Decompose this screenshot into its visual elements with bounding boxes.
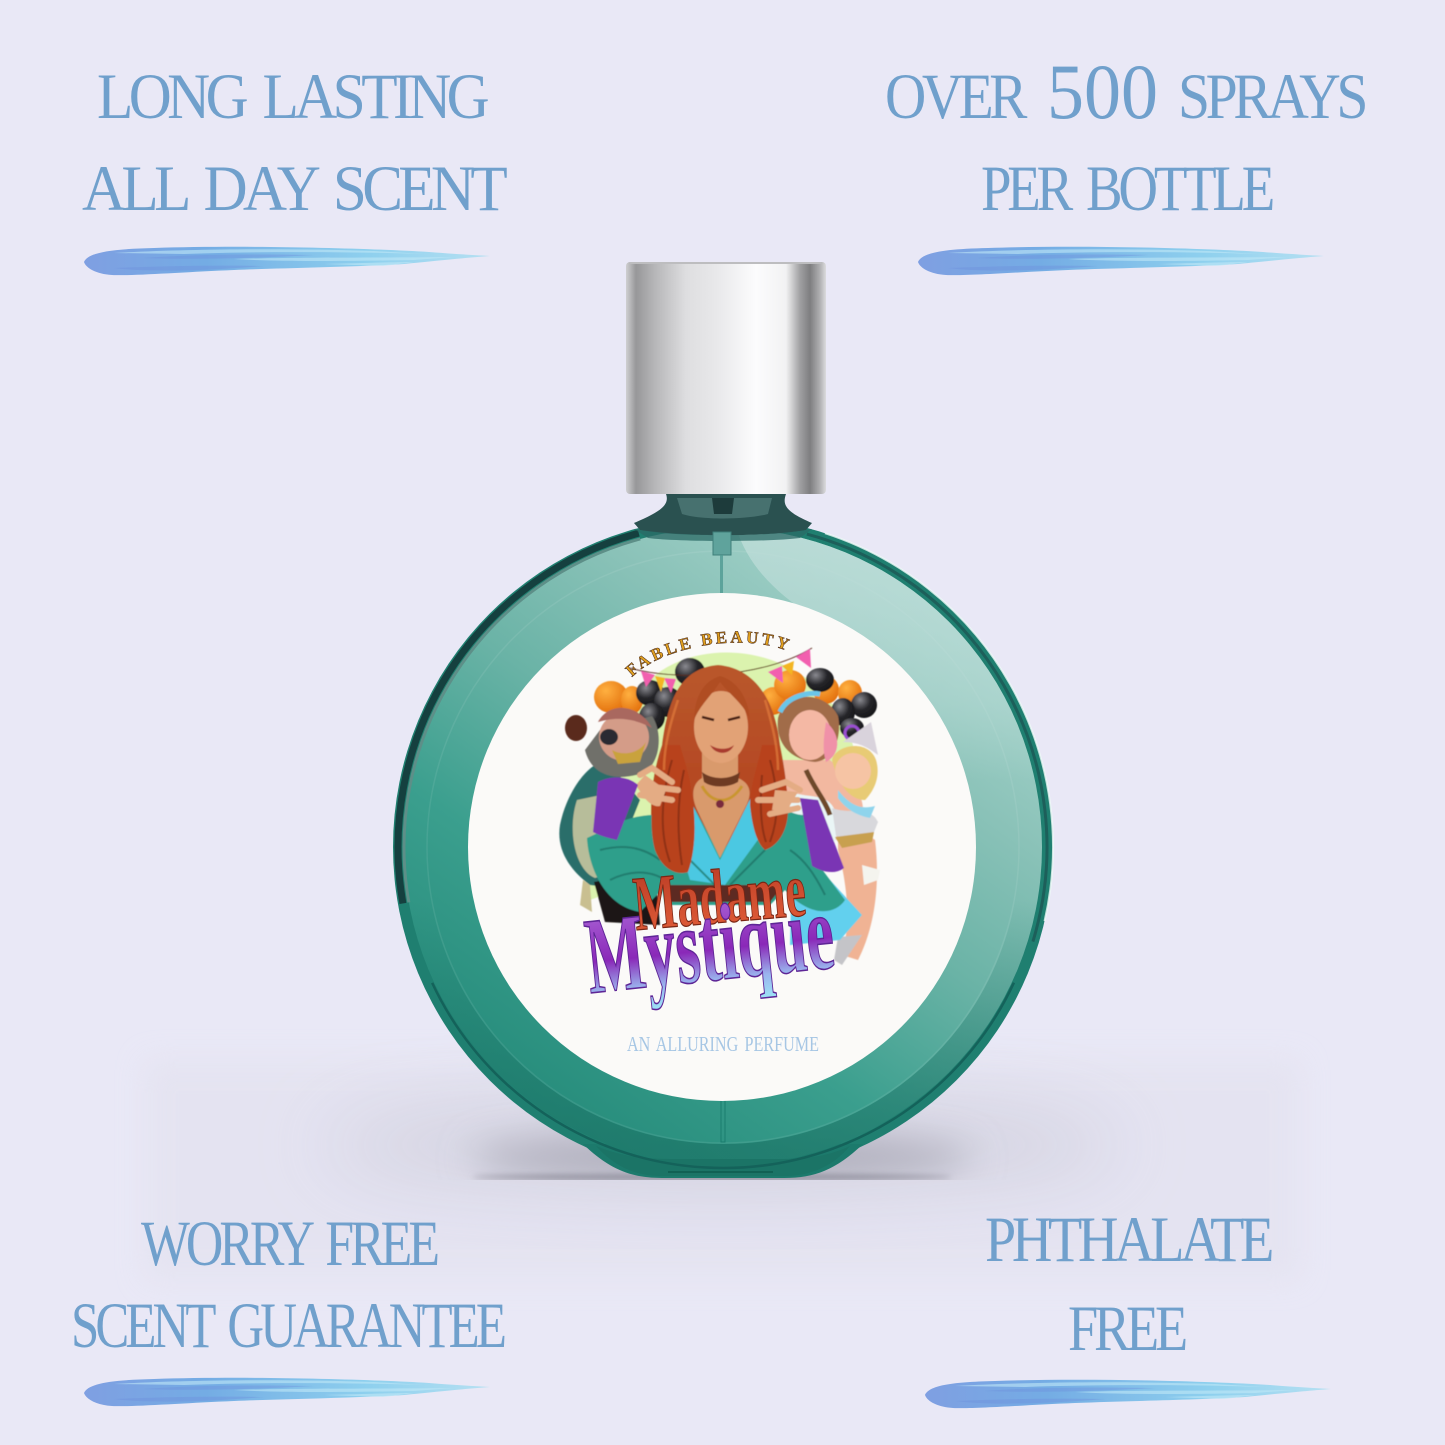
label illustration [558,631,879,1017]
blue cape [790,860,862,945]
perfume bottle [393,262,1054,1178]
bunting [630,648,812,693]
balloons [594,658,877,740]
brush stroke: top left [84,247,490,275]
heading: over 500 sprays per bottle [885,48,1366,225]
main woman hair [651,665,788,880]
heading: phthalate free: FREE [1068,1293,1186,1365]
spray tube [634,529,812,1142]
main woman front hair [652,700,788,873]
floor shadow [320,1078,1124,1224]
green backdrop [587,652,860,900]
purple gloves [593,777,844,872]
brush stroke: top right [918,247,1324,275]
heading: phthalate free: PHTHALATE [985,1204,1272,1276]
round label [468,593,976,1101]
heading: worry free scent guarantee: WORRY FREE [141,1208,438,1280]
bottle glass body [404,528,1042,1166]
heading: over 500 sprays per bottle: PER BOTTLE [981,153,1273,225]
heading: over 500 sprays per bottle: SPRAYS [1178,61,1366,133]
silver cap [626,262,826,494]
heading: over 500 sprays per bottle: OVER [885,61,1028,133]
main woman skin [636,676,800,858]
heading: long lasting all day scent: ALL DAY SCENT [82,153,507,225]
pirate [559,708,660,925]
heading: worry free scent guarantee [71,1208,505,1362]
glass rim lines [296,420,1150,1274]
heading: long lasting all day scent [82,61,507,225]
heading: worry free scent guarantee: SCENT GUARANTEE [71,1290,505,1362]
heading: phthalate free [985,1204,1272,1365]
heading: over 500 sprays per bottle: 500 [1047,48,1158,135]
bottle base [596,1146,850,1176]
bottle outer shell [393,517,1053,1178]
label tagline: AN ALLURING PERFUME [627,1032,819,1056]
bottom shading [415,539,1031,1155]
brand name: FABLE BEAUTY [624,631,790,678]
heading: long lasting all day scent: LONG LASTING [97,61,488,133]
woman with blue headband [775,693,863,852]
title: Mystique: Mystique [580,871,839,1017]
woman with silver helmet [832,722,880,965]
glass highlight [741,534,1024,742]
main woman dress [587,790,845,912]
neck [634,494,812,535]
title: Madame: Madame [630,848,809,948]
brush stroke: bottom left [84,1378,490,1406]
brush stroke: bottom right [925,1380,1331,1408]
inner band [427,551,1019,1143]
